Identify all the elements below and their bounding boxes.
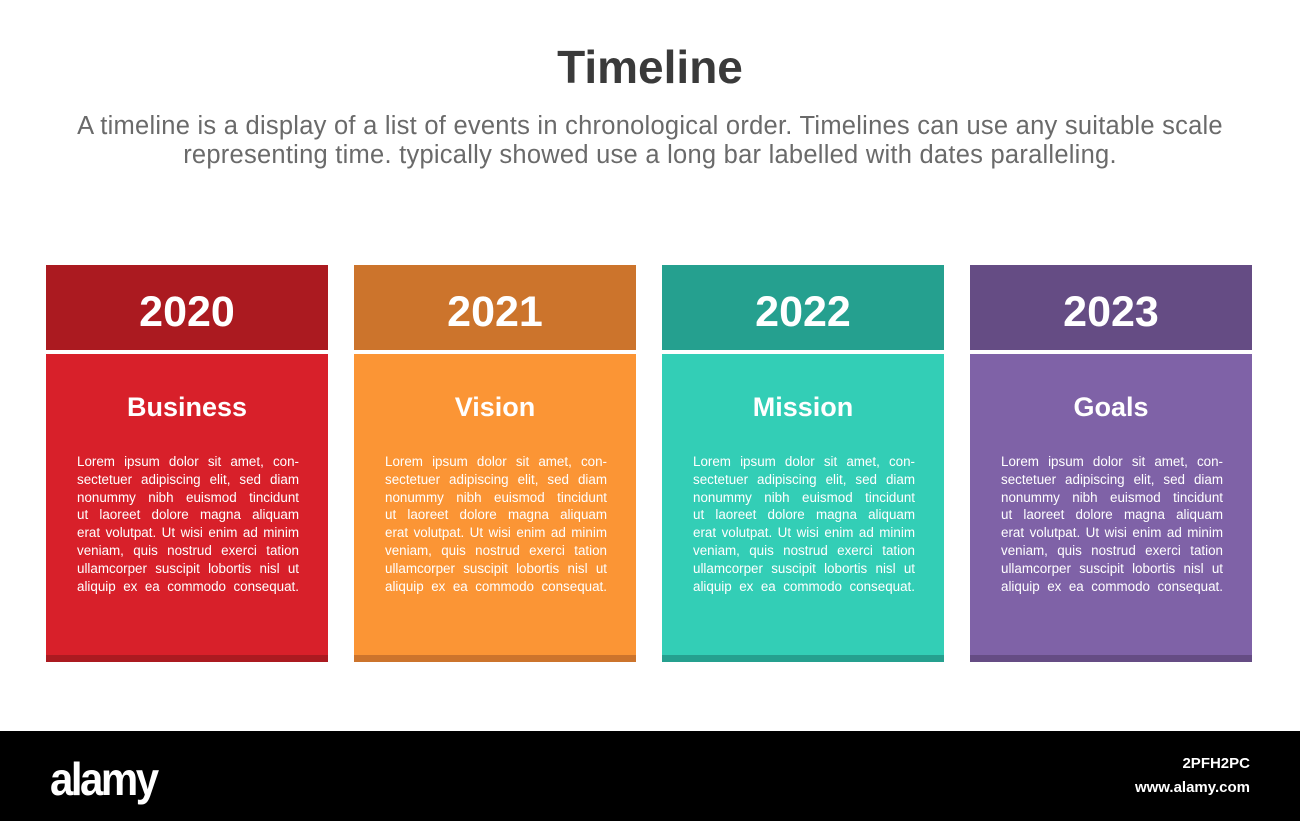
heading Vision: Vision bbox=[455, 392, 535, 422]
card: 2021 bbox=[354, 265, 636, 662]
text bbox=[385, 454, 607, 594]
logo: alamy bbox=[50, 753, 157, 805]
text bbox=[693, 454, 915, 594]
card: 2020 bbox=[46, 265, 328, 662]
text: erat volutpat. Ut wisi enim ad minim bbox=[77, 525, 299, 540]
text: ullamcorper suscipit lobortis nisl ut bbox=[1001, 561, 1223, 576]
header 2021 bbox=[354, 265, 636, 350]
text: aliquip ex ea commodo consequat. bbox=[385, 579, 607, 594]
header 2023: 2023 bbox=[1063, 288, 1159, 336]
card: 2022 bbox=[662, 265, 944, 662]
text: sectetuer adipiscing elit, sed diam bbox=[385, 472, 607, 487]
text bbox=[1001, 454, 1223, 594]
subtitle: representing time. typically showed use a long bar labelled with dates paralleling. bbox=[183, 141, 1117, 169]
text: erat volutpat. Ut wisi enim ad minim bbox=[693, 525, 915, 540]
text: veniam, quis nostrud exerci tation bbox=[693, 543, 915, 558]
header 2022: 2022 bbox=[755, 288, 851, 336]
text: Lorem ipsum dolor sit amet, con- bbox=[385, 454, 607, 469]
text: sectetuer adipiscing elit, sed diam bbox=[1001, 472, 1223, 487]
title: Timeline bbox=[557, 41, 743, 93]
text: ut laoreet dolore magna aliquam bbox=[1001, 507, 1223, 522]
text: sectetuer adipiscing elit, sed diam bbox=[77, 472, 299, 487]
text: nonummy nibh euismod tincidunt bbox=[1001, 490, 1223, 505]
text: nonummy nibh euismod tincidunt bbox=[385, 490, 607, 505]
header 2022 bbox=[662, 265, 944, 350]
header 2020: 2020 bbox=[139, 288, 235, 336]
text: erat volutpat. Ut wisi enim ad minim bbox=[385, 525, 607, 540]
text: ut laoreet dolore magna aliquam bbox=[693, 507, 915, 522]
header 2020 bbox=[46, 265, 328, 350]
subtitle bbox=[77, 112, 1223, 169]
text: veniam, quis nostrud exerci tation bbox=[77, 543, 299, 558]
text: nonummy nibh euismod tincidunt bbox=[693, 490, 915, 505]
text: Lorem ipsum dolor sit amet, con- bbox=[1001, 454, 1223, 469]
heading Goals: Goals bbox=[1073, 392, 1149, 422]
heading Business: Business bbox=[127, 392, 247, 422]
text: aliquip ex ea commodo consequat. bbox=[1001, 579, 1223, 594]
text: nonummy nibh euismod tincidunt bbox=[77, 490, 299, 505]
text: aliquip ex ea commodo consequat. bbox=[693, 579, 915, 594]
image id bbox=[1135, 755, 1250, 796]
image id: 2PFH2PC bbox=[1182, 755, 1250, 772]
header 2021: 2021 bbox=[447, 288, 543, 336]
card: 2023 bbox=[970, 265, 1252, 662]
text: Lorem ipsum dolor sit amet, con- bbox=[77, 454, 299, 469]
text: ullamcorper suscipit lobortis nisl ut bbox=[693, 561, 915, 576]
footer bar bbox=[0, 731, 1300, 821]
text: aliquip ex ea commodo consequat. bbox=[77, 579, 299, 594]
text: sectetuer adipiscing elit, sed diam bbox=[693, 472, 915, 487]
text: Lorem ipsum dolor sit amet, con- bbox=[693, 454, 915, 469]
text: erat volutpat. Ut wisi enim ad minim bbox=[1001, 525, 1223, 540]
heading Mission: Mission bbox=[753, 392, 853, 422]
header 2023 bbox=[970, 265, 1252, 350]
subtitle: A timeline is a display of a list of events in chronological order. Timelines can use any suitable scale bbox=[77, 112, 1223, 140]
text: ullamcorper suscipit lobortis nisl ut bbox=[385, 561, 607, 576]
text: ut laoreet dolore magna aliquam bbox=[385, 507, 607, 522]
text: ut laoreet dolore magna aliquam bbox=[77, 507, 299, 522]
text: veniam, quis nostrud exerci tation bbox=[1001, 543, 1223, 558]
image id: www.alamy.com bbox=[1135, 779, 1250, 796]
text: veniam, quis nostrud exerci tation bbox=[385, 543, 607, 558]
text: ullamcorper suscipit lobortis nisl ut bbox=[77, 561, 299, 576]
text bbox=[77, 454, 299, 594]
